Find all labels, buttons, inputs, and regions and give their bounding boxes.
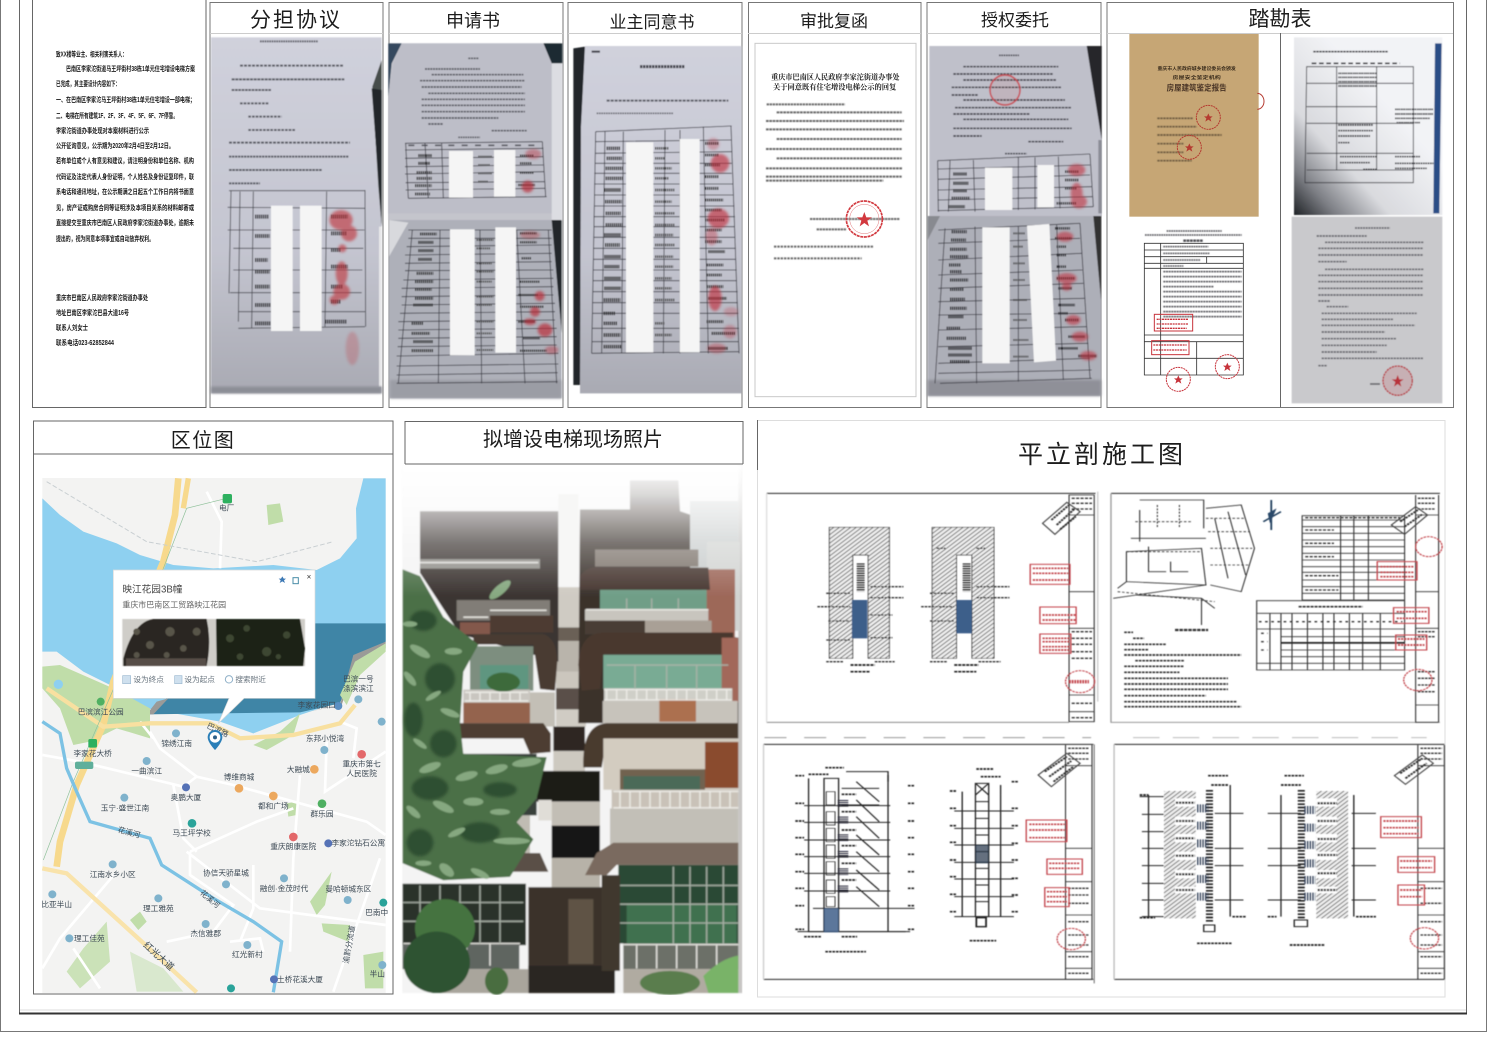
place labels: 土桥花溪大厦 — [277, 974, 323, 984]
building appraisal cover — [1129, 34, 1264, 217]
shrubs — [403, 899, 738, 995]
area table — [1302, 516, 1405, 600]
place labels: 一曲滨江 — [131, 766, 162, 776]
approval stamps — [1381, 755, 1439, 949]
notice text: 巴南区李家沱街道马王坪街村38栋1单元住宅增设电梯方案 — [66, 64, 195, 73]
notice text: 联系人刘女士 — [56, 323, 88, 332]
place labels: 巴滨一号 — [343, 674, 374, 684]
approval stamps — [1030, 502, 1095, 693]
panel: power of attorney — [927, 2, 1102, 408]
info popup: 映江花园3B幢 — [122, 583, 183, 595]
place labels: 马王坪学校 — [173, 828, 211, 838]
place labels — [41, 502, 388, 984]
notice text — [56, 50, 195, 347]
section b — [1316, 791, 1348, 918]
notice text: 李家沱街道办事处现对本案材料进行公示 — [56, 126, 149, 135]
plan a — [817, 527, 903, 672]
notice text: 直接提交至重庆市巴南区人民政府李家沱街道办事处，逾期未 — [56, 218, 194, 227]
heading: 区位图 — [171, 429, 235, 452]
panel: approval reply — [748, 2, 921, 408]
info popup: 设为终点 — [133, 674, 164, 684]
elevation b — [954, 783, 1014, 927]
equipment table — [1257, 601, 1405, 670]
place labels: 融创·金茂时代 — [260, 883, 309, 893]
place labels: 大融城 — [287, 764, 310, 774]
approval stamps — [1377, 507, 1442, 691]
elevation a — [798, 772, 915, 932]
location marker — [208, 730, 222, 750]
place labels: 花溪河 — [117, 824, 142, 840]
approval stamps — [1026, 753, 1085, 950]
plan caption and notes — [1124, 630, 1241, 707]
place labels: 协信天骄星城 — [203, 868, 249, 878]
notice text: 公开征询意见，公示期为2020年2月4日至2月12日。 — [56, 141, 174, 150]
left building — [403, 511, 558, 993]
centre stair column — [528, 587, 615, 993]
panel: construction drawings — [758, 420, 1445, 997]
notice text: 地址巴南区李家沱巴县大道16号 — [56, 308, 129, 317]
notice text: 代码证及法定代表人身份证明，个人姓名及身份证复印件，联 — [56, 172, 194, 181]
building appraisal cover: 房屋安全鉴定机构 — [1172, 74, 1222, 81]
place labels: 巴滨路 — [205, 720, 231, 739]
notice text: 提出的，视为同意本项事宜或自动放弃权利。 — [56, 234, 154, 243]
signed survey sheet — [1292, 37, 1442, 403]
heading: 分担协议 — [250, 9, 342, 32]
drawing sheet: sections — [1114, 738, 1444, 979]
place labels: 理工佳苑 — [74, 933, 105, 943]
place labels: 电厂 — [219, 502, 235, 512]
place labels: 人民医院 — [346, 768, 377, 778]
river water — [42, 478, 386, 733]
panel: survey forms — [1107, 2, 1454, 408]
document photo — [928, 46, 1102, 396]
notice text: 致XX楼等业主、相关利害关系人： — [56, 50, 127, 58]
place labels: 东邦小悦湾 — [306, 733, 344, 743]
section a — [1164, 791, 1196, 918]
place labels: 李家花大桥 — [74, 748, 112, 758]
heading: 平立剖施工图 — [1018, 441, 1186, 469]
overexposed top fade — [402, 465, 742, 597]
heading: 授权委托 — [981, 11, 1049, 30]
railings — [403, 563, 738, 968]
place labels: 理工雅苑 — [143, 903, 174, 913]
panel: site photo — [402, 422, 743, 995]
place labels: 曼哈顿城东区 — [325, 883, 372, 893]
place labels: 巴滨滨江公园 — [78, 706, 124, 716]
heading: 拟增设电梯现场照片 — [483, 428, 663, 451]
notice text: 联系电话023-62852844 — [56, 338, 114, 347]
document photo — [573, 46, 742, 393]
map — [41, 478, 388, 993]
heading: 踏勘表 — [1248, 8, 1312, 31]
notice text: 系电话和通讯地址，在公示期满之日起五个工作日内将书面意 — [56, 187, 194, 196]
map pins — [48, 494, 387, 992]
place labels: 群乐园 — [311, 808, 334, 818]
panel: public notice — [32, 0, 206, 408]
panel: location map — [33, 421, 393, 994]
place labels: 比亚半山 — [41, 899, 72, 909]
photo of building — [402, 465, 742, 995]
panel: owners consent — [568, 2, 742, 408]
parks — [42, 503, 386, 992]
site plan — [1113, 500, 1254, 625]
title block — [1069, 495, 1094, 722]
notice text: 二、电梯在所有建筑1F、2F、3F、4F、5F、6F、7F停靠。 — [56, 111, 178, 120]
building appraisal cover: 房屋建筑鉴定报告 — [1167, 83, 1227, 93]
place labels: 渝黔分流道 — [340, 924, 357, 964]
title block — [1418, 745, 1444, 979]
notice text: 见，房产证或购房合同等证明涉及本项目关系的材料邮寄或 — [56, 203, 194, 212]
info popup: 设为起点 — [184, 674, 215, 684]
place labels: 奥鹏大厦 — [171, 792, 202, 802]
place labels: 花溪河 — [198, 887, 223, 910]
document photo — [388, 43, 562, 398]
place labels: 李家花园口 — [298, 700, 336, 710]
window bars — [403, 598, 738, 944]
panel: cost sharing agreement — [210, 2, 383, 408]
place labels: 重庆市第七 — [343, 758, 381, 768]
drawing sheet: floor plans — [767, 492, 1098, 722]
building appraisal cover: 重庆市人民政府城乡建设委员会颁发 — [1157, 65, 1237, 72]
heading: 业主同意书 — [610, 13, 694, 32]
letter page — [755, 43, 916, 397]
place labels: 杰信雅郡 — [190, 928, 221, 938]
place labels: 锦绣江南 — [161, 738, 192, 748]
red seal — [846, 201, 882, 237]
place labels: 江南水乡小区 — [90, 869, 136, 879]
heading: 申请书 — [446, 11, 500, 31]
info popup: × — [307, 573, 312, 582]
place labels: 红光新村 — [232, 949, 263, 959]
plan b — [921, 527, 1009, 672]
dimension lines — [1140, 785, 1376, 932]
place labels: 博维商城 — [224, 771, 255, 781]
place labels: 玉宁·盛世江南 — [101, 802, 150, 812]
panel: application form — [388, 2, 563, 408]
creek — [42, 722, 282, 992]
letter page: 重庆市巴南区人民政府李家沱街道办事处 — [771, 71, 900, 81]
place labels: 巴南中 — [365, 907, 388, 917]
popup photo — [122, 619, 305, 666]
title block — [1416, 495, 1439, 722]
seal report page — [1292, 217, 1442, 403]
place labels: 红光大道 — [141, 939, 177, 972]
document photo — [211, 37, 382, 393]
title block — [1066, 745, 1092, 979]
commission form — [1133, 223, 1260, 397]
info popup — [113, 570, 315, 723]
tree foliage — [402, 569, 547, 881]
notice text: 重庆市巴南区人民政府李家沱街道办事处 — [56, 293, 148, 302]
notice text: 已完成，其主要设计内容如下： — [56, 79, 120, 88]
place labels: 李家沱钻石公寓 — [332, 837, 385, 847]
letter page: 关于同意既有住宅增设电梯公示的回复 — [773, 81, 897, 91]
place labels: 都和广场 — [258, 800, 289, 810]
place labels: 涤滨滨江 — [343, 683, 374, 693]
dark overlay — [147, 623, 386, 714]
notice text: 一、在巴南区李家沱马王坪街村38栋1单元住宅增设一部电梯； — [56, 95, 195, 104]
minor roads — [42, 492, 386, 992]
notice text: 若有单位或个人有意见和建议，请注明身份和单位名称、机构 — [56, 156, 194, 165]
drawing sheet: site plan and tables — [1111, 493, 1442, 722]
right building — [578, 481, 740, 993]
place labels: 半山 — [370, 969, 385, 979]
expressway — [57, 478, 178, 867]
drawing sheet: elevations — [764, 738, 1094, 983]
place labels: 重庆朗康医院 — [270, 841, 317, 851]
info popup: 重庆市巴南区工贸路映江花园 — [122, 600, 226, 610]
info popup: 搜索附近 — [235, 674, 266, 684]
heading: 审批复函 — [800, 12, 868, 31]
